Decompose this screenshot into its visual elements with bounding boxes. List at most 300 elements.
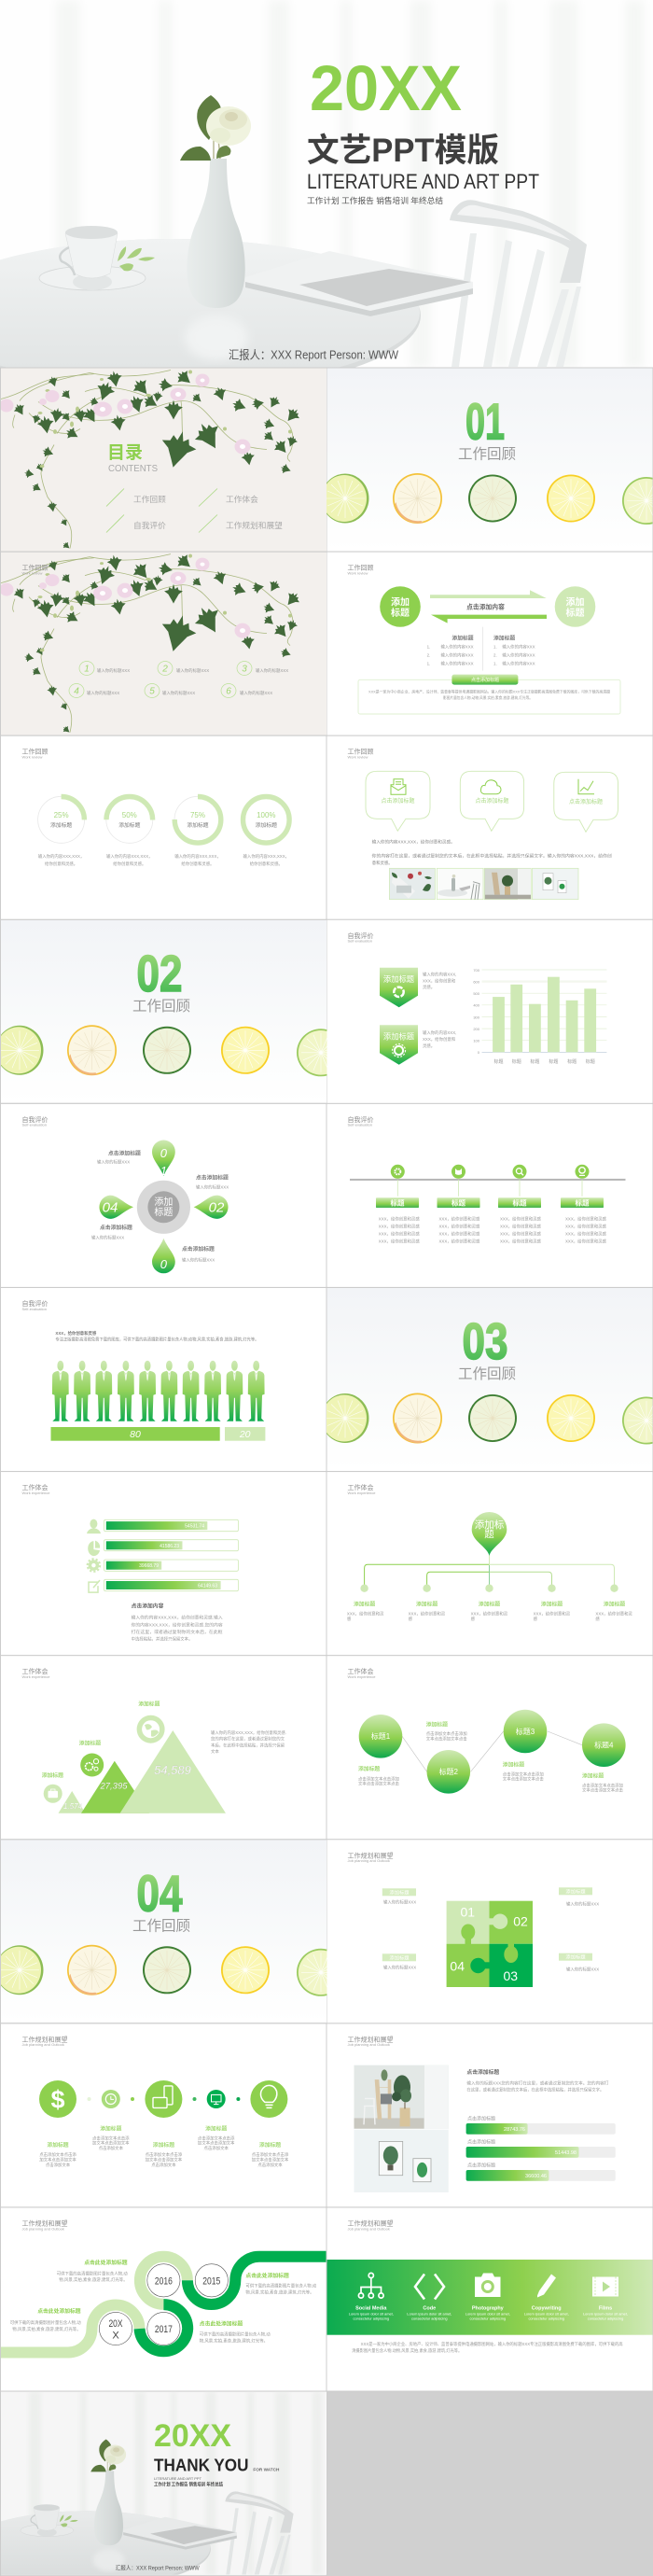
numbered items: 6 bbox=[226, 687, 231, 697]
description box bbox=[358, 679, 620, 714]
puzzle: 04 bbox=[450, 1958, 465, 1973]
lemon slices bbox=[0, 1025, 345, 1076]
bar chart: 300 bbox=[473, 1015, 480, 1019]
slide header: Job planning and Outlook bbox=[347, 2042, 390, 2047]
text block bbox=[132, 1602, 223, 1642]
bar chart bbox=[473, 968, 606, 1065]
paragraph: 文本 bbox=[211, 1748, 219, 1755]
numbered items: 输入你的标题XXX bbox=[97, 667, 130, 674]
numbered items: 5 bbox=[149, 687, 155, 697]
panel: vine slide with six items bbox=[0, 551, 326, 735]
drop 01: 0 bbox=[160, 1146, 168, 1160]
label one: 输入你的标题XXX bbox=[383, 1899, 416, 1906]
shield badge two bbox=[380, 1025, 418, 1065]
note three: 点击添加文本点击添加 bbox=[503, 1771, 544, 1777]
left title circle: 添加 bbox=[391, 595, 410, 608]
two lists bbox=[427, 627, 535, 671]
slide header: 自我评价 bbox=[347, 1115, 373, 1124]
note 2015: 物,风景,实拍,素食,旅游,建筑,灯光等。 bbox=[245, 2289, 314, 2295]
contents items: 工作规划和展望 bbox=[226, 520, 283, 530]
step two text: 加文本点击添加文本 bbox=[92, 2140, 130, 2147]
slide header: Work experience bbox=[22, 1674, 50, 1679]
slide background bbox=[326, 1104, 653, 1287]
circle title 4: 标题4 bbox=[594, 1741, 614, 1750]
bar chart: 标题 bbox=[567, 1058, 577, 1065]
section title: 工作回顾 bbox=[458, 446, 516, 463]
slide header: Job planning and Outlook bbox=[22, 2042, 64, 2047]
slide header: Self-evaluation bbox=[347, 939, 372, 944]
photo: framed plants bbox=[354, 2130, 449, 2192]
circle title 2: 标题2 bbox=[439, 1767, 459, 1776]
slide header: 工作体会 bbox=[22, 1667, 49, 1675]
step four text: 点击添加文本 bbox=[204, 2145, 229, 2151]
slide background bbox=[326, 736, 653, 919]
timeline texts: XXX，给你创意和灵感 bbox=[500, 1230, 542, 1237]
ring 100% bbox=[243, 797, 289, 843]
panel: progress bars slide bbox=[1, 1472, 326, 1655]
progress bar one: 54531.74 bbox=[185, 1524, 204, 1530]
slide background bbox=[1, 736, 326, 919]
slide header bbox=[347, 564, 373, 575]
center circle bbox=[137, 1181, 190, 1234]
two lists: 2. bbox=[427, 653, 430, 658]
paragraph bbox=[352, 2341, 623, 2354]
slide header: 工作规划和展望 bbox=[22, 2035, 67, 2043]
paragraph: 您的内容打在这里，或者通过复制您的文 bbox=[211, 1736, 285, 1743]
slide background bbox=[1, 2208, 326, 2391]
bar three: 点击添加标题 bbox=[467, 2162, 495, 2168]
slide header: Job planning and Outlook bbox=[347, 1858, 390, 1863]
tree node descriptions: 感 bbox=[347, 1616, 352, 1621]
20 percent bar: 20 bbox=[239, 1429, 251, 1440]
step five text: 点击添加文本点击添 bbox=[252, 2151, 289, 2158]
slide background bbox=[1, 1288, 326, 1471]
bubble: cloud bbox=[460, 771, 524, 831]
tree node descriptions: 感 bbox=[595, 1616, 600, 1621]
puzzle: 03 bbox=[504, 1968, 518, 1983]
ring 50% bbox=[106, 796, 153, 843]
numbered items: 输入你的标题XXX bbox=[176, 667, 209, 674]
lemon slices bbox=[0, 1945, 345, 1996]
timeline texts: XXX，给你创意和灵感 bbox=[565, 1224, 607, 1230]
icon: user bbox=[87, 1519, 101, 1533]
two lists: 1. bbox=[493, 645, 497, 650]
shield badge text one: 灵感。 bbox=[423, 984, 435, 990]
circle title 2 bbox=[427, 1750, 470, 1794]
step three text: 点击添加文本点击添 bbox=[146, 2151, 183, 2158]
panel: thank you slide bbox=[0, 2392, 326, 2576]
bar chart: 标题 bbox=[512, 1058, 521, 1065]
note 20XX: 可供下载的高清摄影图片量包含人物,动 bbox=[10, 2319, 81, 2326]
bubble: cloud: 点击添加标题 bbox=[475, 797, 509, 805]
contents items: 工作体会 bbox=[226, 494, 258, 504]
icon: gear bbox=[88, 1559, 100, 1572]
body text: 你的内容打在这里，或者通过复制您的文本后，在此框中选择粘贴，并选择只保留文字。输入你的内容XXX,XXX，给你创 bbox=[372, 853, 612, 860]
lemon slices bbox=[321, 1393, 653, 1445]
timeline node three bbox=[498, 1165, 541, 1208]
puzzle bbox=[447, 1901, 533, 1987]
note four: 文本点击添加文本点击 bbox=[582, 1786, 624, 1793]
winding band bbox=[1, 2257, 326, 2352]
timeline texts: XXX，给你创意和灵感 bbox=[565, 1238, 607, 1244]
English subtitle: LITERATURE AND ART PPT bbox=[154, 2476, 202, 2481]
bar chart: 100 bbox=[473, 1038, 480, 1043]
slide header bbox=[22, 1483, 50, 1495]
drop 04: 04 bbox=[103, 1199, 118, 1215]
note 2016 bbox=[57, 2259, 128, 2283]
reporter line: 汇报人：XXX Report Person: WWW bbox=[116, 2564, 200, 2571]
numbered items: 输入你的标题XXX bbox=[256, 667, 288, 674]
step three text: 加文本点击添加文本 bbox=[146, 2156, 183, 2163]
step four text bbox=[198, 2124, 235, 2151]
shield badge two: 添加标题 bbox=[383, 1031, 414, 1041]
note one: 添加标题 bbox=[426, 1720, 448, 1728]
timeline texts: XXX，给你创意和灵感 bbox=[500, 1238, 542, 1244]
timeline texts: XXX，给你创意和灵感 bbox=[565, 1216, 607, 1223]
text block: 在这里，或者通过复制您的文本后，在此框中选择粘贴，并选择只保留文字。 bbox=[466, 2087, 604, 2093]
panel: section 01 bbox=[321, 368, 653, 551]
timeline node four: 标题 bbox=[575, 1197, 590, 1207]
ring captions: 给你创意和灵感。 bbox=[45, 861, 77, 867]
bar one: 28743.76 bbox=[504, 2127, 525, 2133]
cover reporter line: 汇报人：XXX Report Person: WWW bbox=[229, 347, 398, 362]
progress bar one bbox=[104, 1519, 238, 1532]
tree node labels: 添加标题 bbox=[604, 1600, 625, 1607]
numbered items: 输入你的标题XXX bbox=[87, 690, 119, 696]
text block: 输入你的内容XXX,XXX，给你创意和灵感.输入 bbox=[132, 1615, 223, 1621]
note one: 文本点击添加文本点击 bbox=[426, 1735, 467, 1742]
slide header bbox=[22, 564, 49, 575]
timeline node three: 标题 bbox=[513, 1197, 527, 1207]
panel: progress rings slide bbox=[1, 736, 326, 919]
slide header: 自我评价 bbox=[22, 1299, 49, 1308]
tree node descriptions: XXX，给你创意和灵 bbox=[347, 1610, 384, 1617]
label four: 输入你的标题XXX bbox=[566, 1966, 599, 1972]
timeline texts bbox=[379, 1216, 607, 1244]
note three bbox=[503, 1760, 544, 1783]
feature: films: consectetur adipiscing bbox=[588, 2317, 623, 2321]
text block: 中选择粘贴，并选择只保留文本。 bbox=[132, 1635, 192, 1642]
step five text: 点击添加文本 bbox=[257, 2162, 283, 2168]
bar one: 点击添加标题 bbox=[467, 2115, 495, 2121]
note two: 点击添加文本点击添加 bbox=[358, 1775, 399, 1782]
ring 25% bbox=[38, 796, 85, 843]
step two text: 添加标题 bbox=[100, 2124, 122, 2132]
shield badge one bbox=[380, 968, 418, 1007]
contents items bbox=[106, 489, 283, 532]
tree node descriptions: 感 bbox=[409, 1616, 413, 1621]
bubble: mail: 点击添加标题 bbox=[381, 797, 415, 805]
cover photo: vase, rose, cup, book and chair bbox=[0, 0, 653, 392]
ring 100%: 100% bbox=[257, 811, 276, 819]
slide background bbox=[1, 1472, 326, 1655]
feature: photography: Photography bbox=[472, 2306, 505, 2312]
timeline texts: XXX，给你创意和灵感 bbox=[438, 1216, 480, 1223]
slide header: Self-evaluation bbox=[22, 1307, 47, 1311]
step five text bbox=[252, 2141, 289, 2168]
bar chart: 标题 bbox=[586, 1058, 595, 1065]
slide header bbox=[22, 2219, 67, 2231]
section background bbox=[326, 368, 653, 551]
bar three: 36600.46 bbox=[525, 2174, 547, 2179]
slide header: Work review bbox=[347, 570, 368, 575]
tree root pin: 添加标 bbox=[475, 1519, 505, 1531]
bar one bbox=[466, 2115, 616, 2135]
note 2015: 点击此处添加标题 bbox=[245, 2272, 289, 2279]
ring captions: 输入你的内容XXX,XXX， bbox=[106, 853, 153, 860]
slide header bbox=[22, 1299, 49, 1311]
ring 75%: 75% bbox=[190, 811, 205, 819]
icon: clock bbox=[102, 2090, 120, 2108]
panel: images and bars slide bbox=[326, 2023, 653, 2206]
photo thumbnail: framed plants bbox=[532, 868, 578, 900]
callout four bbox=[182, 1245, 215, 1263]
year circle 2017: 2017 bbox=[155, 2324, 173, 2335]
label two bbox=[559, 1887, 599, 1908]
shield badge text one: XXX，给你创意和 bbox=[423, 977, 455, 984]
feature: films: Lorem ipsum dolor sit amet, bbox=[583, 2312, 628, 2317]
photo thumbnail: table and chair bbox=[437, 868, 483, 900]
feature: copywriting: consectetur adipiscing bbox=[528, 2317, 564, 2321]
drop 03 bbox=[152, 1239, 175, 1273]
panel: winding timeline slide bbox=[1, 2208, 326, 2391]
drop 01: 1 bbox=[160, 1164, 167, 1178]
ring 25%: 添加标题 bbox=[50, 821, 72, 829]
feature: social media: Social Media bbox=[355, 2306, 387, 2312]
panel: two-way arrows slide bbox=[326, 553, 653, 735]
bar chart: 600 bbox=[473, 979, 480, 984]
contents English label: CONTENTS bbox=[108, 463, 158, 474]
process dots bbox=[88, 2097, 240, 2101]
body text bbox=[372, 839, 612, 866]
bar two bbox=[466, 2138, 616, 2158]
slide header: 工作规划和展望 bbox=[22, 2219, 67, 2227]
circle title 1 bbox=[359, 1715, 402, 1758]
slide background bbox=[326, 1840, 653, 2023]
panel: gradient band slide bbox=[326, 2208, 653, 2391]
slide header: Job planning and Outlook bbox=[22, 2226, 64, 2231]
bar three bbox=[466, 2162, 616, 2181]
ring 100%: 添加标题 bbox=[256, 821, 277, 829]
bubble: mail bbox=[366, 771, 430, 831]
panel: contents bbox=[0, 367, 326, 551]
20 percent bar bbox=[225, 1427, 265, 1441]
timeline texts: XXX，给你创意和灵感 bbox=[379, 1224, 420, 1230]
slide header: Work review bbox=[22, 755, 43, 760]
text block bbox=[466, 2068, 609, 2093]
note 20XX bbox=[10, 2307, 81, 2332]
two lists: 添加标题 bbox=[493, 634, 515, 641]
note two: 添加标题 bbox=[358, 1765, 380, 1772]
slide header: Work experience bbox=[22, 1491, 50, 1495]
section number: 01 bbox=[465, 392, 505, 450]
shield badge text one: 输入你的内容XXX, bbox=[423, 971, 456, 977]
note 2017: 可供下载的高清摄影图片量包含人物,动 bbox=[200, 2331, 271, 2338]
paragraph: 清摄影图片量包含人物,动物,风景,实拍,素食,旅游,建筑,灯光等。 bbox=[352, 2347, 462, 2354]
triangle labels: 添加标题 bbox=[138, 1701, 160, 1708]
right title circle: 标题 bbox=[565, 607, 584, 619]
slide header bbox=[347, 1483, 376, 1495]
section background bbox=[1, 1840, 326, 2023]
label three: 添加标题 bbox=[389, 1953, 410, 1961]
callout two: 输入你的标题XXX bbox=[196, 1184, 229, 1191]
slide header: Self-evaluation bbox=[22, 1123, 47, 1127]
feature: social media: Lorem ipsum dolor sit amet, bbox=[349, 2312, 394, 2317]
step three text bbox=[146, 2141, 183, 2168]
icon: gears bbox=[80, 1753, 104, 1777]
section background bbox=[326, 1288, 653, 1471]
center circle: 标题 bbox=[154, 1207, 173, 1218]
shield badge one: 添加标题 bbox=[383, 974, 414, 984]
slide background bbox=[326, 2208, 653, 2391]
contents items: 自我评价 bbox=[133, 520, 166, 530]
callout four: 输入你的标题XXX bbox=[182, 1256, 215, 1263]
note 2017: 点击此处添加标题 bbox=[200, 2320, 243, 2328]
left title circle: 标题 bbox=[391, 607, 410, 619]
step three text: 点击添加文本 bbox=[151, 2162, 176, 2168]
slide header bbox=[22, 748, 49, 760]
shield badge text two bbox=[423, 1029, 456, 1049]
cover year title: 20XX bbox=[310, 52, 462, 124]
button: 点击添加标题 bbox=[471, 677, 499, 683]
timeline texts: XXX，给你创意和灵感 bbox=[438, 1230, 480, 1237]
tree node labels: 添加标题 bbox=[354, 1600, 375, 1607]
body text: 输入你的内容XXX,XXX，给你创意和灵感。 bbox=[372, 839, 455, 846]
label one bbox=[382, 1888, 416, 1906]
slide header: 工作回顾 bbox=[347, 564, 373, 572]
vine photo background bbox=[0, 551, 326, 735]
label two: 添加标题 bbox=[565, 1887, 586, 1895]
circle title 1: 标题1 bbox=[371, 1731, 391, 1741]
slide background bbox=[326, 920, 653, 1103]
tree node descriptions: 感 bbox=[471, 1616, 476, 1621]
callout three: 输入你的标题XXX bbox=[91, 1235, 124, 1241]
circle title 4 bbox=[582, 1723, 626, 1767]
bar two: 点击添加标题 bbox=[467, 2138, 495, 2145]
slide header: Self-evaluation bbox=[347, 1123, 372, 1127]
intro text: 专注正版摄影高清图免费下载的图库，可供下载的高清摄影图片量包含人物,动物,风景,实拍,素食,旅游,建筑,灯光等。 bbox=[55, 1337, 258, 1343]
triangle chart bbox=[58, 1730, 226, 1813]
slide header bbox=[347, 931, 373, 944]
drop 04 bbox=[99, 1196, 133, 1219]
panel: section 04 bbox=[0, 1840, 345, 2023]
slide header bbox=[347, 1851, 394, 1863]
tree node descriptions bbox=[347, 1610, 633, 1621]
tagline: 工作计划 工作报告 销售培训 年终总结 bbox=[154, 2482, 223, 2488]
photo thumbnail: plant bbox=[484, 868, 531, 900]
contents heading: 目录 bbox=[107, 442, 143, 463]
puzzle: 01 bbox=[461, 1905, 475, 1920]
text block: 打在这里，或者通过复制你的文本后，在此框 bbox=[132, 1629, 223, 1635]
callout four: 点击添加标题 bbox=[182, 1245, 215, 1253]
tree node descriptions: XXX，给你创意和灵 bbox=[534, 1610, 571, 1617]
panel: speech bubbles slide bbox=[326, 736, 653, 919]
closing photo bbox=[0, 2392, 326, 2576]
shield badge text two: XXX，给你创意和 bbox=[423, 1036, 455, 1043]
slide background bbox=[326, 2023, 653, 2206]
slide header bbox=[347, 1667, 376, 1679]
shield badge text two: 灵感。 bbox=[423, 1043, 435, 1049]
label four bbox=[559, 1953, 599, 1972]
vine photo background bbox=[0, 367, 326, 551]
step one text: 点击添加文本 bbox=[46, 2162, 71, 2168]
two lists: 1. bbox=[427, 645, 430, 650]
ring 75%: 添加标题 bbox=[187, 821, 209, 829]
panel: cover slide bbox=[0, 0, 653, 392]
step two text: 点击添加文本点击添 bbox=[92, 2135, 130, 2141]
icon: devices bbox=[145, 2080, 182, 2118]
two lists: 输入你的内容XXX bbox=[502, 661, 535, 667]
icon: light bulb bbox=[250, 2080, 287, 2118]
note one bbox=[426, 1720, 467, 1742]
tree node descriptions: XXX，给你创意和灵 bbox=[595, 1610, 633, 1617]
year circle 20XX: 20X bbox=[108, 2318, 123, 2330]
ring captions: 输入你的内容XXX,XXX， bbox=[174, 853, 221, 860]
step one text: 加文本点击添加文本 bbox=[39, 2156, 76, 2163]
feature: films: Films bbox=[599, 2306, 612, 2312]
slide header: 工作规划和展望 bbox=[347, 2219, 394, 2227]
label three bbox=[382, 1953, 416, 1970]
section number: 03 bbox=[463, 1312, 507, 1370]
slide header bbox=[22, 1115, 49, 1127]
note three: 文本点击添加文本点击 bbox=[503, 1776, 544, 1783]
text block: 点击添加内容 bbox=[132, 1602, 164, 1609]
slide background bbox=[326, 1472, 653, 1655]
progress bar four bbox=[104, 1579, 238, 1591]
two lists: 添加标题 bbox=[452, 634, 474, 641]
tree node labels: 添加标题 bbox=[479, 1600, 500, 1607]
step three text: 添加标题 bbox=[153, 2141, 174, 2149]
callout one: 点击添加标题 bbox=[108, 1149, 141, 1156]
center circle: 添加 bbox=[154, 1196, 173, 1208]
timeline node two bbox=[437, 1165, 479, 1208]
section background bbox=[1, 920, 326, 1103]
body text: 意和灵感。 bbox=[372, 860, 393, 866]
note four: 添加标题 bbox=[582, 1771, 604, 1779]
triangle labels: 添加标题 bbox=[79, 1740, 101, 1747]
progress bar two: 41586.23 bbox=[160, 1544, 179, 1549]
callout three: 点击添加标题 bbox=[100, 1224, 132, 1231]
arrow: left bbox=[431, 615, 547, 623]
numbered items: 3 bbox=[242, 665, 247, 675]
progress bar two bbox=[104, 1540, 238, 1551]
drop 02 bbox=[194, 1196, 229, 1219]
panel: section 03 bbox=[321, 1288, 653, 1471]
ring captions: 输入你的内容XXX,XXX， bbox=[38, 853, 84, 860]
note two bbox=[358, 1765, 400, 1787]
numbered items: 1 bbox=[84, 665, 90, 675]
triangle chart: 54,589 bbox=[154, 1763, 191, 1777]
ring captions: 给你创意和灵感。 bbox=[181, 861, 215, 867]
two lists: 输入你的内容XXX bbox=[502, 652, 535, 659]
slide background bbox=[326, 553, 653, 735]
bar chart: 400 bbox=[473, 1003, 480, 1008]
bar two: 51443.98 bbox=[555, 2150, 577, 2156]
bubble: chart: 点击添加标题 bbox=[569, 798, 603, 805]
bar chart: 0 bbox=[478, 1050, 480, 1055]
cover tagline: 工作计划 工作报告 销售培训 年终总结 bbox=[307, 196, 443, 205]
icon: monitor bbox=[207, 2090, 226, 2108]
slide header bbox=[22, 1667, 50, 1679]
year circle 20XX: X bbox=[112, 2330, 119, 2341]
step four text: 加文本点击添加文本 bbox=[198, 2140, 235, 2147]
note 20XX: 物,风景,实拍,素食,旅游,建筑,灯光等。 bbox=[12, 2326, 81, 2332]
section title: 工作回顾 bbox=[132, 1917, 190, 1934]
slide header: Work experience bbox=[347, 1674, 376, 1679]
section title: 工作回顾 bbox=[132, 998, 190, 1015]
tree node labels: 添加标题 bbox=[541, 1600, 563, 1607]
slide header: Work review bbox=[347, 755, 368, 760]
